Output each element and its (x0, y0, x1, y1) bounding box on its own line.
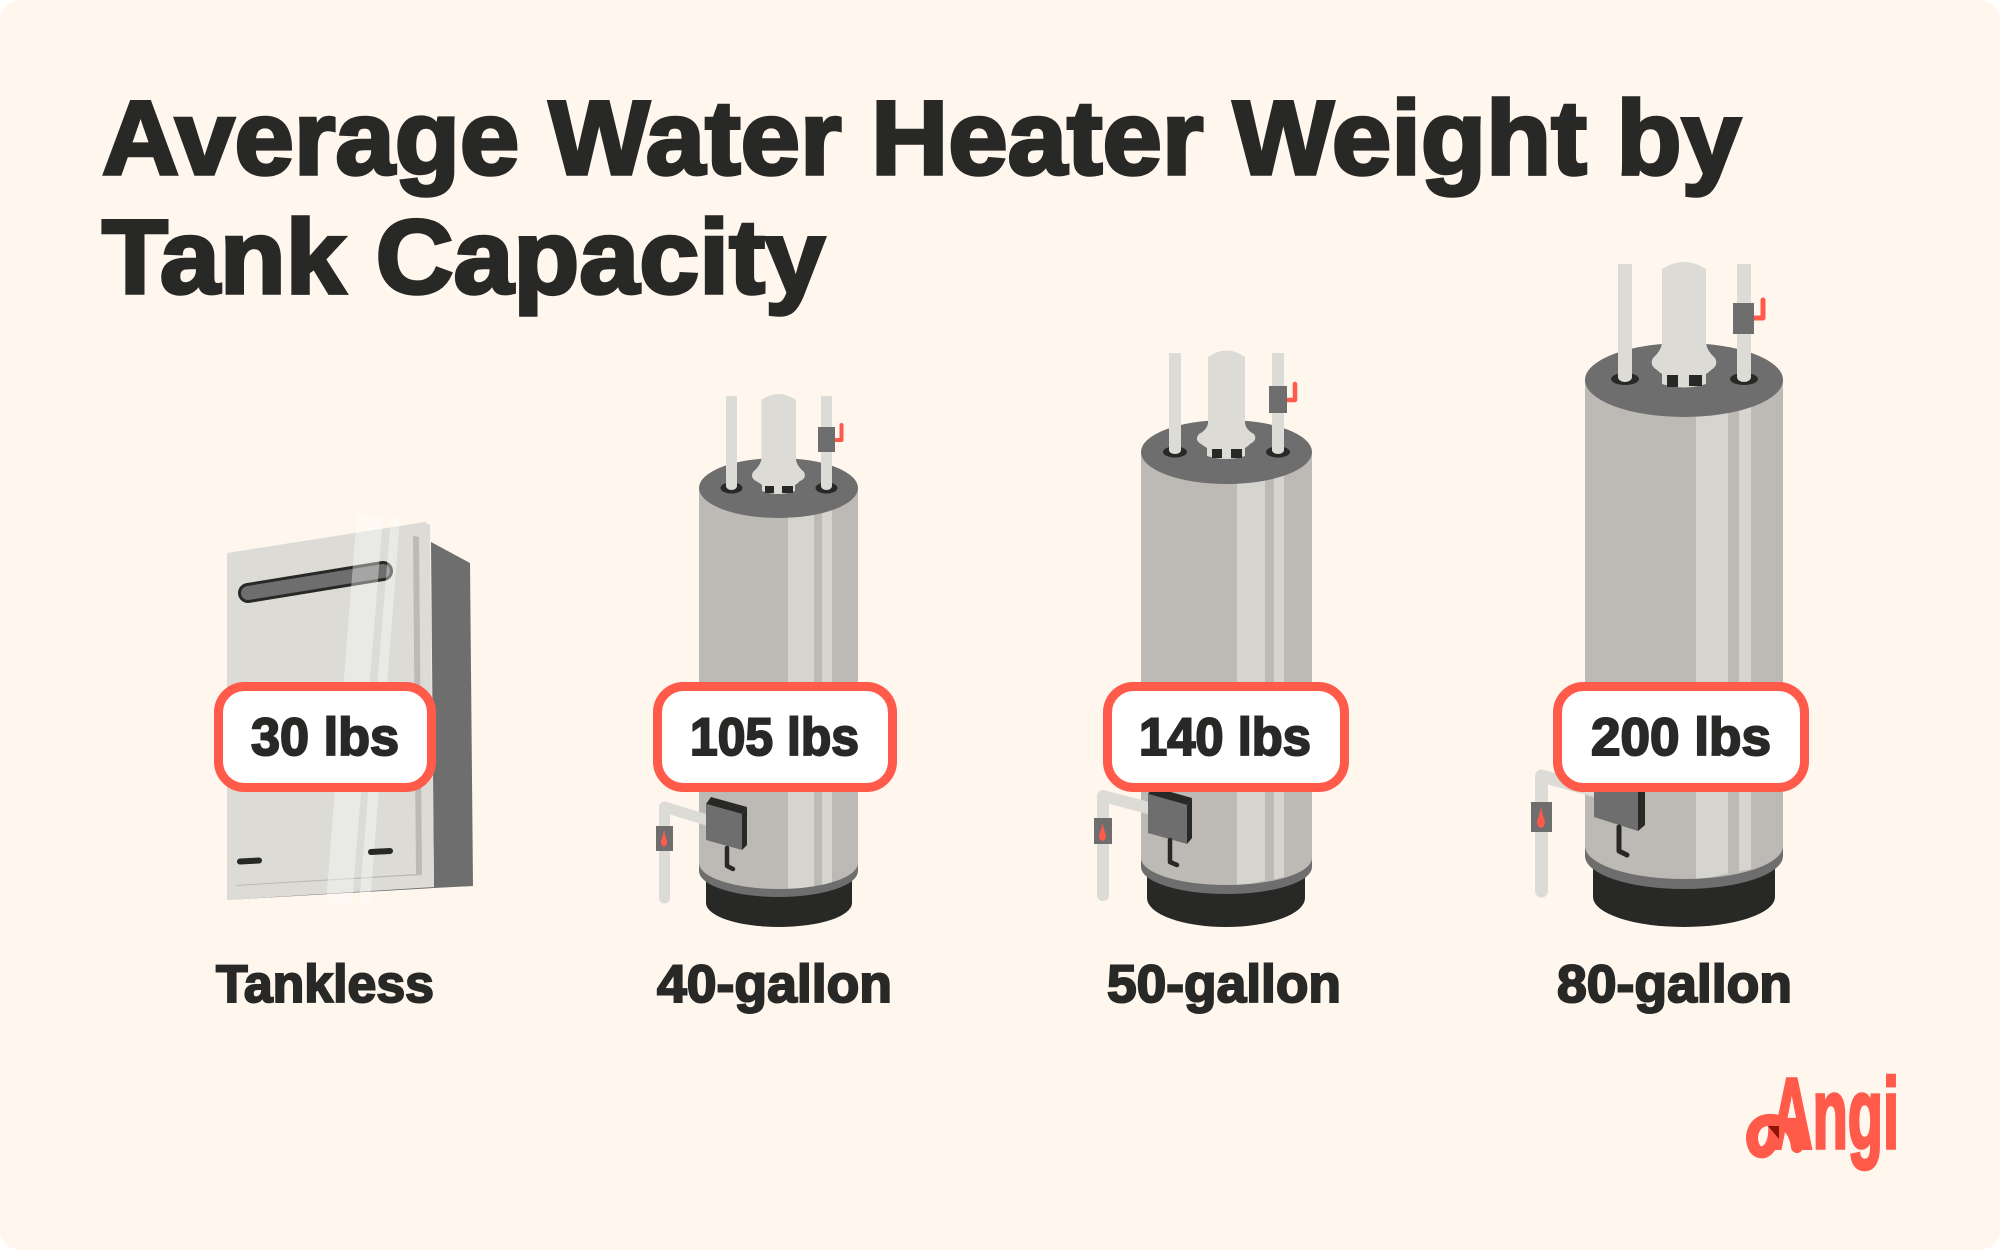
flue vents (1667, 375, 1702, 387)
base (1147, 865, 1305, 927)
pipe holes (720, 482, 838, 494)
flue vents (1212, 449, 1242, 458)
weight badge: 30 lbs (218, 686, 432, 788)
title (102, 80, 1741, 316)
pressure valve (818, 425, 842, 452)
tank body (699, 488, 858, 889)
icon: 80-gallon water heater (1531, 262, 1783, 927)
label: 80-gallon: 80-gallon (1557, 955, 1792, 1014)
logo: Angi (1752, 1058, 1899, 1170)
tankless front face (227, 522, 434, 900)
weight badge: 30 lbs: 30 lbs (251, 708, 399, 767)
body highlights (1237, 468, 1284, 885)
hot pipe (1737, 264, 1751, 382)
tankless bottom edge (227, 886, 473, 900)
tankless side panel (431, 542, 473, 887)
pressure valve (1269, 384, 1295, 413)
body highlights (1696, 402, 1751, 879)
cold pipe (1618, 264, 1632, 382)
pressure valve (1733, 300, 1763, 334)
control box (1594, 772, 1645, 855)
hot pipe (1272, 353, 1284, 454)
flue (1197, 350, 1255, 459)
pipe holes (1163, 446, 1290, 458)
base (706, 870, 852, 927)
logo: Angi: Angi (1771, 1058, 1899, 1170)
flue vents (765, 486, 793, 493)
shutoff valve (1094, 818, 1112, 844)
tank body (1585, 380, 1783, 879)
weight badge: 105 lbs: 105 lbs (690, 708, 859, 767)
supply pipe (664, 807, 710, 898)
weight badge: 105 lbs (658, 686, 892, 788)
supply pipe (1103, 796, 1152, 895)
cold pipe (726, 396, 737, 490)
tankless vents (240, 851, 390, 862)
weight badge: 140 lbs: 140 lbs (1139, 708, 1311, 767)
weight badge: 140 lbs (1108, 686, 1344, 788)
body highlights (788, 501, 832, 889)
base (1593, 855, 1775, 927)
weight badge: 200 lbs: 200 lbs (1591, 708, 1771, 767)
label: 40-gallon: 40-gallon (657, 955, 892, 1014)
tank body (1141, 452, 1312, 885)
pipe holes (1611, 373, 1758, 385)
weight badge: 200 lbs (1558, 686, 1804, 788)
hot pipe (821, 396, 832, 490)
flue (752, 394, 805, 494)
control box (1148, 787, 1192, 865)
drain rim (1585, 846, 1783, 889)
supply pipe (1542, 776, 1596, 891)
icon: 40-gallon water heater (656, 394, 858, 927)
label: 50-gallon: 50-gallon (1107, 955, 1341, 1014)
title: Average Water Heater Weight by (102, 80, 1741, 197)
top cap (699, 458, 858, 518)
shutoff valve (1531, 802, 1552, 832)
drain rim (1141, 858, 1312, 894)
tankless display slot (248, 571, 383, 593)
shutoff valve (656, 826, 673, 851)
title: Tank Capacity (102, 199, 825, 316)
icon: tankless water heater (227, 514, 473, 905)
label: Tankless: Tankless (216, 955, 434, 1014)
top cap (1585, 343, 1783, 417)
control box (706, 797, 747, 869)
tankless inner panel edge (236, 536, 422, 886)
flue (1652, 262, 1716, 388)
top cap (1141, 420, 1312, 484)
tankless glass highlights (326, 514, 400, 905)
icon: 50-gallon water heater (1094, 350, 1312, 927)
cold pipe (1169, 353, 1181, 454)
drain rim (699, 863, 858, 897)
